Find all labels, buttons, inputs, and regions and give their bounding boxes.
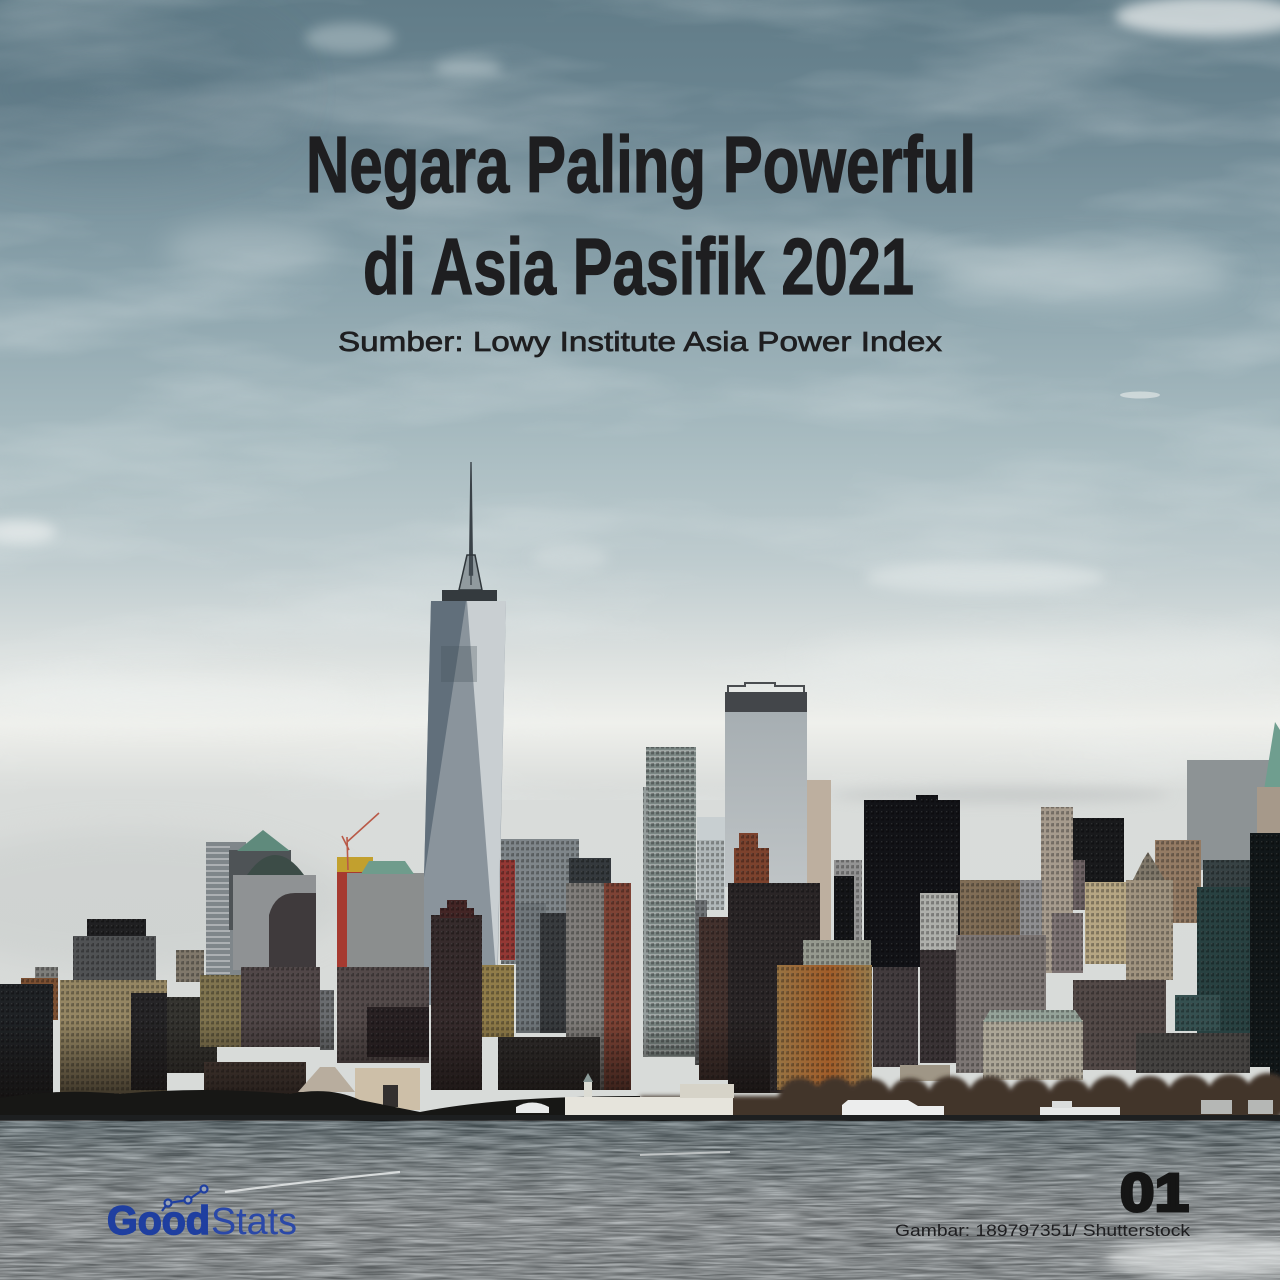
boat wakes: [225, 1172, 400, 1192]
building: green roof tower: [347, 861, 424, 968]
building: rear grey tower with stripes: [206, 830, 291, 977]
skyline: front buildings: [0, 747, 1280, 1114]
title: di Asia Pasifik 2021: [363, 222, 914, 311]
title: [306, 120, 976, 311]
building: white glass rear block: [697, 817, 725, 907]
shoreline: [0, 1115, 1280, 1122]
subtitle: source: Sumber: Lowy Institute Asia Power Index: [338, 326, 942, 357]
building: tall glass tower: [725, 683, 807, 887]
skyline: rear glass towers: [206, 462, 1280, 1005]
building: beige narrow tower: [807, 780, 831, 940]
building: red construction tower and crane: [337, 813, 379, 970]
white pier building: [565, 1073, 734, 1116]
title: Negara Paling Powerful: [306, 120, 976, 209]
logo: GoodStats: [107, 1186, 297, 1243]
page number: 01: [1120, 1163, 1189, 1223]
waterfront: low buildings, trees and boats: [0, 1065, 1280, 1122]
clouds: [0, 0, 1280, 970]
tan low block behind trees: [900, 1065, 950, 1081]
image credit: Gambar: 189797351/ Shutterstock: [895, 1221, 1191, 1240]
water: [0, 1121, 1280, 1280]
foam bottom right: [1105, 1238, 1280, 1278]
white tent: [842, 1100, 944, 1115]
building base shading: [0, 1020, 770, 1100]
low stepped building: [298, 1067, 420, 1110]
brown shoreline trees right: [640, 1073, 1280, 1122]
ferry boat: [1040, 1101, 1120, 1116]
logo: GoodStats: Stats: [211, 1201, 297, 1243]
building: dome tower: [233, 855, 316, 980]
One World Trade Center: [424, 462, 506, 1005]
building: green spire: [1257, 722, 1280, 837]
building: grey office with stepped top: [73, 919, 156, 982]
white storage boxes: [1201, 1100, 1273, 1114]
logo: GoodStats: Good: [107, 1199, 210, 1243]
building: grey top right office: [1187, 760, 1269, 870]
window grid overlay: [1, 747, 1279, 1094]
dark shoreline trees left: [0, 1090, 640, 1120]
white pavilion: [516, 1102, 549, 1113]
